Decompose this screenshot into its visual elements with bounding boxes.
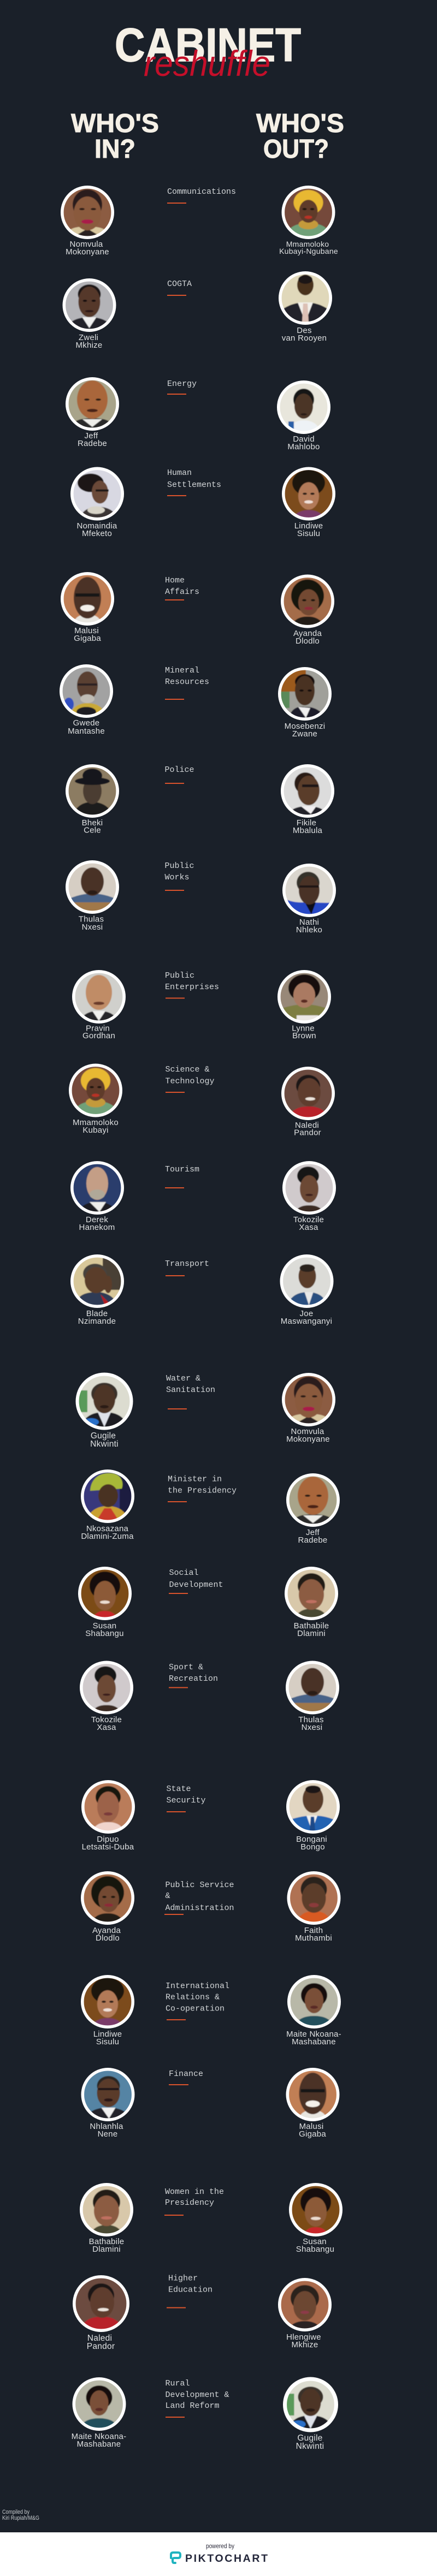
portfolio label: Sanitation bbox=[166, 1385, 215, 1395]
portfolio label bbox=[165, 666, 209, 700]
photo bbox=[60, 664, 113, 718]
name: Mkhize bbox=[291, 2340, 318, 2349]
person out: Mosebenzi Zwane bbox=[278, 667, 332, 739]
name: Hanekom bbox=[79, 1223, 115, 1232]
portfolio label: Communications bbox=[167, 187, 236, 197]
name: Brown bbox=[292, 1031, 316, 1040]
photo bbox=[81, 1470, 134, 1523]
person in: Lindiwe Sisulu bbox=[81, 1975, 134, 2046]
photo bbox=[285, 1567, 338, 1620]
name: Gigaba bbox=[299, 2129, 326, 2139]
name: Zweli bbox=[79, 333, 98, 342]
portfolio label: Development & bbox=[165, 2390, 229, 2400]
name: Ayanda bbox=[293, 629, 322, 638]
person out: Hlengiwe Mkhize bbox=[278, 2278, 332, 2349]
photo bbox=[283, 2377, 338, 2432]
name: Bheki bbox=[82, 818, 103, 828]
name: Lynne bbox=[292, 1024, 315, 1033]
photo bbox=[75, 1372, 133, 1430]
photo bbox=[286, 1473, 340, 1527]
photo bbox=[70, 1161, 124, 1215]
portfolio label bbox=[167, 187, 236, 204]
photo bbox=[287, 1975, 341, 2028]
person out: Thulas Nxesi bbox=[286, 1661, 339, 1732]
name: Derek bbox=[86, 1215, 108, 1224]
name: Mokonyane bbox=[66, 247, 109, 257]
name: Gigaba bbox=[74, 634, 101, 643]
photo bbox=[69, 1063, 122, 1117]
photo bbox=[281, 764, 334, 818]
photo bbox=[62, 278, 116, 332]
name: Hlengiwe bbox=[286, 2333, 321, 2342]
name: Nathi bbox=[299, 918, 319, 927]
photo bbox=[282, 467, 335, 521]
name: Susan bbox=[303, 2237, 327, 2246]
portfolio label bbox=[165, 861, 194, 891]
row: International Relations & Co-operation bbox=[81, 1975, 341, 2046]
name: Xasa bbox=[299, 1223, 318, 1232]
photo bbox=[70, 467, 124, 521]
portfolio label: Social bbox=[169, 1568, 199, 1578]
name: Dipuo bbox=[97, 1835, 119, 1844]
person out: Susan Shabangu bbox=[289, 2183, 342, 2254]
photo bbox=[72, 2377, 126, 2431]
photo bbox=[66, 764, 119, 818]
name: Jeff bbox=[85, 431, 98, 441]
portfolio label bbox=[165, 1065, 215, 1093]
person in: Mmamoloko Kubayi bbox=[69, 1063, 122, 1135]
name: Tokozile bbox=[293, 1215, 324, 1224]
name: Gordhan bbox=[82, 1031, 115, 1040]
person out: Maite Nkoana-Mashabane bbox=[286, 1975, 341, 2046]
name: Nkwinti bbox=[90, 1439, 119, 1449]
name: Nkosazana bbox=[86, 1524, 129, 1533]
name: Ayanda bbox=[92, 1926, 121, 1935]
person in: Nkosazana Dlamini-Zuma bbox=[81, 1470, 134, 1541]
name: Malusi bbox=[74, 626, 99, 635]
name: Dlodlo bbox=[296, 636, 320, 646]
name: Kubayi-Ngubane bbox=[279, 247, 338, 255]
person in: Dipuo Letsatsi-Duba bbox=[81, 1780, 135, 1852]
person out: David Mahlobo bbox=[277, 380, 330, 451]
name: Mbalula bbox=[293, 826, 323, 835]
portfolio label: & bbox=[165, 1891, 170, 1901]
name: Sisulu bbox=[96, 2037, 119, 2046]
name: Joe bbox=[300, 1309, 313, 1318]
portfolio label bbox=[165, 1165, 199, 1188]
portfolio label: Recreation bbox=[169, 1674, 218, 1683]
name: Nkwinti bbox=[296, 2442, 324, 2451]
name: Gwede bbox=[73, 718, 99, 728]
name: Dlodlo bbox=[96, 1934, 120, 1943]
row: Home Affairs bbox=[61, 572, 334, 646]
name: Pandor bbox=[294, 1128, 321, 1138]
portfolio label bbox=[165, 971, 219, 999]
photo bbox=[81, 1871, 134, 1925]
person out: Joe Maswanganyi bbox=[280, 1254, 333, 1326]
photo bbox=[282, 1373, 335, 1426]
name: Mkhize bbox=[75, 341, 103, 350]
photo bbox=[80, 1661, 133, 1714]
portfolio label: Sport & bbox=[169, 1663, 203, 1672]
row: Transport bbox=[70, 1254, 333, 1326]
photo bbox=[286, 2068, 340, 2121]
name: Susan bbox=[93, 1621, 116, 1631]
photo bbox=[286, 1661, 339, 1714]
portfolio label: Enterprises bbox=[165, 983, 219, 992]
photo bbox=[61, 572, 114, 626]
portfolio label: Development bbox=[169, 1580, 223, 1590]
person in: Gugile Nkwinti bbox=[75, 1372, 133, 1449]
row: Finance bbox=[81, 2068, 340, 2139]
photo bbox=[277, 380, 330, 434]
photo bbox=[78, 1567, 132, 1620]
portfolio label bbox=[169, 1568, 223, 1594]
portfolio label: Minister in bbox=[168, 1475, 222, 1484]
person in: Bheki Cele bbox=[66, 764, 119, 835]
name: Tokozile bbox=[91, 1715, 122, 1724]
portfolio label bbox=[165, 2379, 229, 2418]
row: Energy bbox=[66, 377, 330, 451]
name: Bongo bbox=[300, 1842, 325, 1852]
portfolio label: Mineral bbox=[165, 666, 199, 675]
row: Sport & Recreation bbox=[80, 1661, 339, 1732]
photo bbox=[282, 186, 335, 239]
photo bbox=[81, 1975, 134, 2028]
person out: Faith Muthambi bbox=[287, 1871, 341, 1943]
person out: Gugile Nkwinti bbox=[283, 2377, 338, 2451]
portfolio label: International bbox=[166, 1982, 229, 1991]
photo bbox=[281, 574, 334, 628]
person in: Malusi Gigaba bbox=[61, 572, 114, 643]
name: Mashabane bbox=[292, 2037, 336, 2046]
photo bbox=[66, 860, 119, 914]
name: Shabangu bbox=[85, 1629, 124, 1638]
name: Malusi bbox=[299, 2122, 323, 2131]
name: David bbox=[293, 435, 315, 444]
photo bbox=[278, 667, 332, 721]
portfolio label: State bbox=[166, 1784, 191, 1794]
person in: Jeff Radebe bbox=[66, 377, 119, 448]
portfolio label: Land Reform bbox=[165, 2401, 220, 2411]
portfolio label: Security bbox=[166, 1796, 206, 1805]
title: reshuffle bbox=[144, 43, 270, 84]
person in: Nhlanhla Nene bbox=[81, 2068, 134, 2139]
row: Human Settlements bbox=[70, 467, 335, 538]
person out: Jeff Radebe bbox=[286, 1473, 340, 1545]
name: Bathabile bbox=[294, 1621, 329, 1631]
portfolio label: Public bbox=[165, 861, 194, 871]
person out: Malusi Gigaba bbox=[286, 2068, 340, 2139]
heading: who's out: OUT? bbox=[263, 135, 329, 164]
photo bbox=[277, 970, 331, 1024]
portfolio label: Women in the bbox=[165, 2187, 224, 2197]
name: Thulas bbox=[298, 1715, 324, 1724]
name: Xasa bbox=[97, 1723, 116, 1732]
credit: Kiri Rupiah/M&G bbox=[2, 2515, 39, 2521]
portfolio label bbox=[168, 1475, 237, 1502]
name: Gugile bbox=[297, 2434, 323, 2443]
person out: Ayanda Dlodlo bbox=[281, 574, 334, 646]
portfolio label bbox=[164, 2187, 224, 2216]
photo bbox=[72, 970, 126, 1024]
portfolio label: Water & bbox=[166, 1374, 200, 1383]
name: Mashabane bbox=[77, 2440, 121, 2449]
name: Radebe bbox=[78, 439, 107, 448]
name: Dlamini bbox=[297, 1629, 326, 1638]
row: Women in the Presidency bbox=[80, 2183, 342, 2254]
portfolio label: Relations & bbox=[166, 1992, 220, 2002]
portfolio label: Science & bbox=[165, 1065, 210, 1074]
portfolio label: the Presidency bbox=[168, 1486, 237, 1496]
portfolio label: Works bbox=[165, 873, 190, 882]
portfolio label bbox=[165, 576, 199, 600]
name: Thulas bbox=[79, 915, 104, 924]
person in: Ayanda Dlodlo bbox=[81, 1871, 134, 1943]
person in: Nomaindia Mfeketo bbox=[70, 467, 124, 538]
row: Public Service & Administration bbox=[81, 1871, 341, 1943]
portfolio label bbox=[165, 1259, 209, 1276]
row: Minister in the Presidency bbox=[81, 1470, 340, 1545]
photo bbox=[73, 2275, 129, 2332]
portfolio label bbox=[167, 379, 197, 395]
name: Maite Nkoana- bbox=[286, 2030, 341, 2039]
portfolio label bbox=[169, 1663, 218, 1688]
person out: Mmamoloko Kubayi-Ngubane bbox=[279, 186, 338, 255]
name: Dlamini bbox=[92, 2245, 121, 2254]
name: Gugile bbox=[91, 1431, 116, 1441]
name: Radebe bbox=[298, 1536, 328, 1545]
photo bbox=[66, 377, 119, 431]
photo bbox=[61, 186, 114, 239]
portfolio label: Home bbox=[165, 576, 185, 585]
name: Naledi bbox=[295, 1121, 319, 1130]
portfolio label: Administration bbox=[165, 1903, 234, 1913]
row: Science & Technology bbox=[69, 1063, 335, 1138]
portfolio label: Public bbox=[165, 971, 194, 980]
footer: powered by Piktochart bbox=[0, 2532, 437, 2576]
portfolio label: Transport bbox=[165, 1259, 209, 1269]
photo bbox=[282, 1161, 336, 1215]
person out: Lynne Brown bbox=[277, 970, 331, 1040]
portfolio label bbox=[167, 279, 192, 296]
person out: Fikile Mbalula bbox=[281, 764, 334, 835]
person in: Bathabile Dlamini bbox=[80, 2183, 133, 2254]
person in: Derek Hanekom bbox=[70, 1161, 124, 1232]
portfolio label: Energy bbox=[167, 379, 197, 389]
row: Social Development bbox=[78, 1567, 338, 1638]
portfolio label: Education bbox=[168, 2285, 212, 2295]
portfolio label bbox=[167, 2274, 212, 2308]
name: Kubayi bbox=[82, 1126, 109, 1135]
name: Pandor bbox=[87, 2342, 115, 2351]
person out: Des van Rooyen bbox=[279, 271, 332, 343]
row: Public Works bbox=[66, 860, 336, 935]
person in: Blade Nzimande bbox=[70, 1254, 124, 1326]
row: Communications bbox=[61, 186, 338, 257]
portfolio label: Police bbox=[165, 765, 194, 775]
person out: Tokozile Xasa bbox=[282, 1161, 336, 1232]
name: Nomvula bbox=[291, 1427, 324, 1436]
row: COGTA bbox=[62, 271, 332, 350]
photo bbox=[289, 2183, 342, 2236]
portfolio label: Tourism bbox=[165, 1165, 199, 1174]
name: Maite Nkoana- bbox=[72, 2432, 126, 2441]
portfolio label: Rural bbox=[165, 2379, 190, 2388]
person in: Susan Shabangu bbox=[78, 1567, 132, 1638]
portfolio label: Public Service bbox=[165, 1881, 234, 1890]
name: Nomvula bbox=[70, 240, 103, 249]
photo bbox=[282, 864, 336, 917]
person in: Nomvula Mokonyane bbox=[61, 186, 114, 257]
portfolio label: Technology bbox=[165, 1076, 215, 1086]
name: Mmamoloko bbox=[286, 240, 329, 248]
name: van Rooyen bbox=[282, 334, 327, 343]
portfolio label: Finance bbox=[169, 2069, 203, 2079]
name: Naledi bbox=[87, 2334, 112, 2343]
name: Mmamoloko bbox=[73, 1118, 119, 1127]
name: Mfeketo bbox=[82, 529, 112, 538]
row: Tourism bbox=[70, 1161, 336, 1232]
person in: Zweli Mkhize bbox=[62, 278, 116, 350]
name: Sisulu bbox=[297, 529, 320, 538]
name: Nhleko bbox=[296, 925, 322, 935]
name: Des bbox=[297, 326, 312, 335]
row: Water & Sanitation bbox=[75, 1372, 335, 1449]
name: Fikile bbox=[297, 818, 316, 828]
portfolio label bbox=[165, 765, 194, 784]
person in: Gwede Mantashe bbox=[60, 664, 113, 736]
portfolio label: Higher bbox=[168, 2274, 198, 2283]
person in: Tokozile Xasa bbox=[80, 1661, 133, 1732]
name: Nxesi bbox=[82, 923, 103, 932]
name: Mosebenzi bbox=[285, 722, 325, 731]
portfolio label bbox=[164, 1881, 234, 1915]
heading: who's in: IN? bbox=[95, 135, 135, 164]
name: Dlamini-Zuma bbox=[81, 1532, 134, 1541]
name: Bongani bbox=[296, 1835, 327, 1844]
wordmark: PIKTOCHART bbox=[185, 2553, 268, 2565]
portfolio label bbox=[169, 2069, 203, 2085]
name: Maswanganyi bbox=[281, 1317, 332, 1326]
name: Nomaindia bbox=[77, 521, 117, 531]
person out: Bongani Bongo bbox=[286, 1780, 340, 1852]
name: Letsatsi-Duba bbox=[82, 1842, 134, 1852]
name: Cele bbox=[84, 825, 101, 835]
row: Public Enterprises bbox=[72, 970, 331, 1040]
name: Nxesi bbox=[302, 1723, 322, 1732]
person out: Nathi Nhleko bbox=[282, 864, 336, 935]
name: Nhlanhla bbox=[90, 2122, 123, 2131]
photo bbox=[280, 1254, 333, 1308]
portfolio label: Human bbox=[167, 468, 192, 478]
photo bbox=[278, 2278, 332, 2331]
portfolio label: Affairs bbox=[165, 587, 199, 597]
name: Nzimande bbox=[78, 1317, 116, 1326]
person in: Maite Nkoana-Mashabane bbox=[72, 2377, 126, 2449]
name: Zwane bbox=[292, 729, 317, 739]
photo bbox=[286, 1780, 340, 1834]
name: Lindiwe bbox=[294, 521, 323, 531]
name: Blade bbox=[86, 1309, 108, 1318]
name: Muthambi bbox=[295, 1934, 332, 1943]
portfolio label: Presidency bbox=[165, 2198, 214, 2208]
powered by text: powered by bbox=[206, 2542, 234, 2550]
name: Mokonyane bbox=[286, 1435, 330, 1444]
photo bbox=[81, 2068, 134, 2121]
icon: Piktochart logo bbox=[171, 2553, 180, 2563]
photo bbox=[80, 2183, 133, 2236]
portfolio label bbox=[167, 468, 221, 496]
person in: Thulas Nxesi bbox=[66, 860, 119, 932]
portfolio label bbox=[166, 1784, 206, 1812]
person out: Naledi Pandor bbox=[281, 1067, 335, 1138]
person out: Bathabile Dlamini bbox=[285, 1567, 338, 1638]
name: Bathabile bbox=[89, 2237, 124, 2246]
photo bbox=[279, 271, 332, 325]
photo bbox=[81, 1780, 135, 1834]
row: Police bbox=[66, 764, 334, 835]
row: State Security bbox=[81, 1780, 340, 1852]
name: Pravin bbox=[86, 1024, 110, 1033]
row: Mineral Resources bbox=[60, 664, 332, 739]
person out: Lindiwe Sisulu bbox=[282, 467, 335, 538]
portfolio label: COGTA bbox=[167, 279, 192, 289]
name: Mantashe bbox=[68, 727, 105, 736]
portfolio label: Co-operation bbox=[166, 2004, 225, 2013]
photo bbox=[281, 1067, 335, 1120]
person in: Pravin Gordhan bbox=[72, 970, 126, 1040]
name: Shabangu bbox=[296, 2245, 334, 2254]
photo bbox=[287, 1871, 341, 1925]
person in: Naledi Pandor bbox=[73, 2275, 129, 2351]
name: Faith bbox=[304, 1926, 323, 1935]
portfolio label bbox=[166, 1982, 229, 2020]
row: Rural Development & Land Reform bbox=[72, 2377, 338, 2451]
photo bbox=[70, 1254, 124, 1308]
name: Lindiwe bbox=[93, 2030, 122, 2039]
title: CABINET bbox=[115, 19, 301, 72]
heading: who's in: WHO'S bbox=[71, 109, 159, 138]
portfolio label: Settlements bbox=[167, 480, 221, 490]
heading: who's out: WHO'S bbox=[256, 109, 344, 138]
portfolio label: Resources bbox=[165, 677, 209, 687]
person out: Nomvula Mokonyane bbox=[282, 1373, 335, 1444]
portfolio label bbox=[166, 1374, 215, 1409]
credit: Compiled by bbox=[2, 2509, 29, 2515]
row: Higher Education bbox=[73, 2274, 332, 2351]
name: Nene bbox=[98, 2129, 117, 2139]
name: Mahlobo bbox=[287, 442, 320, 451]
name: Jeff bbox=[306, 1528, 320, 1537]
